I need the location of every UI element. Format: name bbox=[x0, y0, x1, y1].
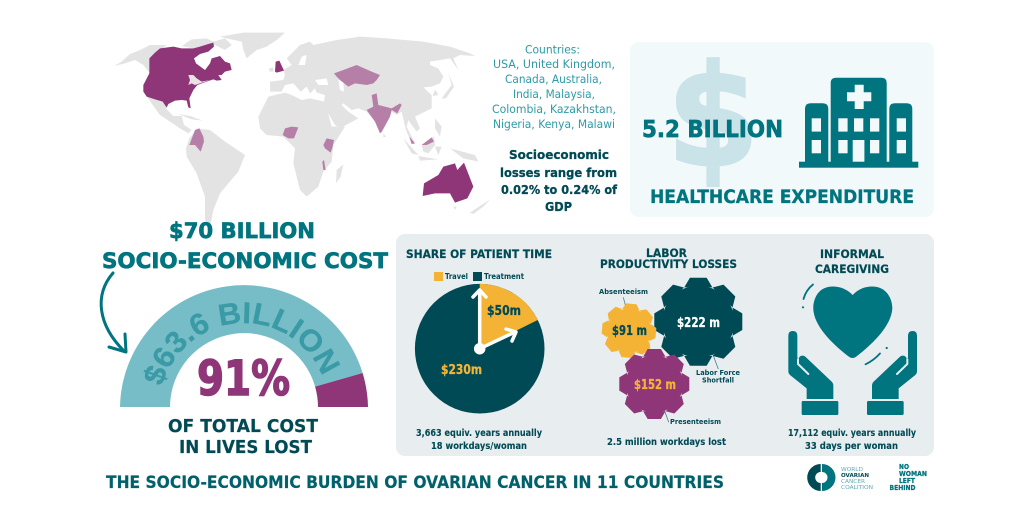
logo: No Woman Left Behind: BEHIND bbox=[890, 484, 916, 492]
country list: Canada, Australia, bbox=[505, 72, 602, 86]
logo: No Woman Left Behind: WOMAN bbox=[899, 470, 927, 478]
logo: No Woman Left Behind: LEFT bbox=[899, 477, 915, 485]
gear: absenteeism bbox=[600, 301, 658, 360]
country list: Countries: bbox=[525, 42, 580, 56]
caregiving stats: 17,112 equiv. years annually bbox=[788, 428, 917, 439]
gauge teal arc bbox=[120, 285, 363, 407]
gear labels: Absenteeism bbox=[599, 288, 648, 296]
country list: USA, United Kingdom, bbox=[493, 57, 615, 71]
gauge curved label: $63.6 BILLION bbox=[144, 302, 340, 384]
gear: presenteeism bbox=[619, 349, 689, 419]
section heading: CAREGIVING bbox=[815, 262, 889, 276]
gauge purple segment bbox=[315, 373, 368, 407]
socioeconomic losses note: Socioeconomic bbox=[509, 147, 609, 162]
logo: No Woman Left Behind: NO bbox=[899, 463, 909, 471]
section heading: LABOR bbox=[646, 246, 687, 260]
heading: socio-economic cost bbox=[102, 219, 389, 273]
workdays lost stat: 2.5 million workdays lost bbox=[607, 437, 726, 448]
caregiving stats: 33 days per woman bbox=[805, 441, 898, 452]
socioeconomic losses note: GDP bbox=[545, 199, 572, 214]
pie chart bbox=[415, 284, 544, 414]
country list: Nigeria, Kenya, Malawi bbox=[493, 117, 615, 131]
section: share of patient time bbox=[406, 247, 552, 452]
pie value travel: $50m bbox=[487, 304, 521, 319]
gauge percentage: 91% bbox=[197, 351, 290, 407]
gauge caption: IN LIVES LOST bbox=[179, 437, 313, 458]
patient time stats: 18 workdays/woman bbox=[431, 441, 527, 452]
heading: socio-economic cost: SOCIO-ECONOMIC COST bbox=[102, 249, 389, 273]
healthcare label: HEALTHCARE EXPENDITURE bbox=[650, 186, 914, 208]
logo: World Ovarian Cancer Coalition: COALITION bbox=[841, 485, 873, 491]
gear values: $152 m bbox=[634, 378, 676, 393]
logo: World Ovarian Cancer Coalition: OVARIAN bbox=[841, 473, 869, 479]
logo: World Ovarian Cancer Coalition bbox=[807, 464, 873, 491]
gear labels: Presenteeism bbox=[670, 418, 721, 426]
gear values: $222 m bbox=[677, 316, 720, 331]
logo: No Woman Left Behind bbox=[890, 463, 927, 492]
panel: cost breakdown bbox=[396, 234, 934, 456]
footer title: THE SOCIO-ECONOMIC BURDEN OF OVARIAN CANCER IN 11 COUNTRIES bbox=[106, 473, 724, 492]
gauge caption: OF TOTAL COST bbox=[168, 416, 319, 437]
gauge caption bbox=[168, 416, 319, 458]
middle-income countries highlighted bbox=[189, 65, 434, 170]
section: informal caregiving bbox=[788, 247, 917, 452]
section heading: INFORMAL bbox=[820, 247, 885, 261]
pie value treatment: $230m bbox=[441, 363, 482, 378]
icon: clock hands bbox=[473, 290, 516, 353]
healthcare figure: 5.2 BILLION bbox=[642, 115, 783, 143]
section heading: PRODUCTIVITY LOSSES bbox=[600, 257, 737, 271]
gear labels bbox=[599, 288, 740, 426]
leader lines bbox=[623, 297, 718, 422]
patient time stats: 3,663 equiv. years annually bbox=[416, 428, 543, 439]
socioeconomic losses note bbox=[500, 147, 617, 214]
pie legend: Treatment bbox=[484, 272, 524, 281]
panel: healthcare expenditure bbox=[630, 36, 934, 217]
world map bbox=[114, 33, 490, 228]
panel background bbox=[630, 42, 934, 217]
section heading bbox=[815, 247, 889, 276]
pie legend bbox=[434, 272, 524, 281]
icon: dollar sign: $ bbox=[667, 36, 759, 199]
arrow: cost to gauge bbox=[101, 273, 126, 352]
section heading bbox=[600, 246, 737, 271]
high-income countries highlighted bbox=[143, 43, 473, 203]
gauge: lives lost share bbox=[120, 285, 368, 407]
pie legend: Travel bbox=[445, 272, 468, 281]
socioeconomic losses note: 0.02% to 0.24% of bbox=[501, 182, 617, 197]
gear labels: Labor Force bbox=[696, 369, 740, 377]
logo: World Ovarian Cancer Coalition: CANCER bbox=[841, 479, 865, 485]
socioeconomic losses note: losses range from bbox=[500, 165, 617, 180]
panel background bbox=[396, 234, 934, 456]
gear values bbox=[612, 316, 720, 393]
section heading: SHARE OF PATIENT TIME bbox=[406, 247, 552, 261]
logo: World Ovarian Cancer Coalition: WORLD bbox=[841, 467, 863, 473]
icon: hospital bbox=[799, 78, 918, 168]
gear values: $91 m bbox=[612, 324, 647, 339]
heading: socio-economic cost: $70 BILLION bbox=[169, 219, 315, 243]
icon: heart in hands bbox=[788, 284, 917, 415]
country list: India, Malaysia, bbox=[513, 87, 595, 101]
gear: labor force shortfall bbox=[654, 278, 742, 366]
country list: Colombia, Kazakhstan, bbox=[492, 102, 616, 116]
caregiving stats bbox=[788, 428, 917, 452]
country list bbox=[492, 42, 616, 131]
patient time stats bbox=[416, 428, 543, 452]
section: labor productivity losses bbox=[599, 246, 742, 448]
gear labels: Shortfall bbox=[702, 376, 734, 384]
